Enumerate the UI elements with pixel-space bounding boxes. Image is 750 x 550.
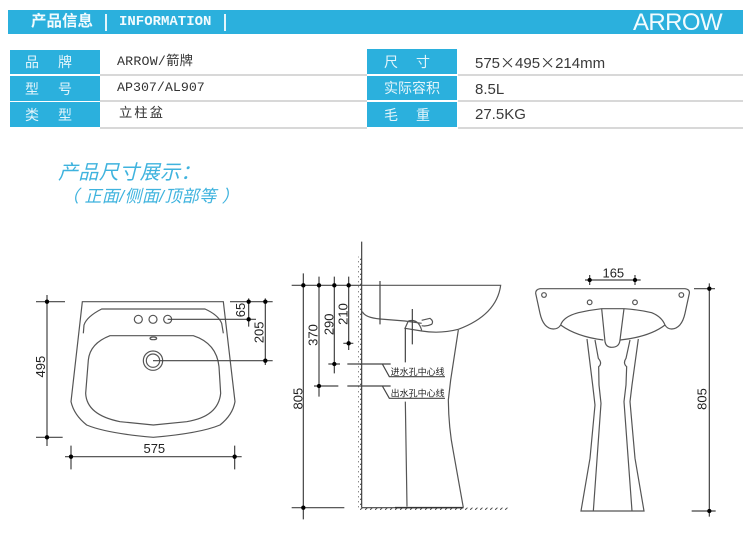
spec table left xyxy=(10,50,367,129)
header title english: INFORMATION xyxy=(119,14,211,30)
tap holes xyxy=(134,315,172,323)
header divider two xyxy=(224,14,226,31)
dimension 805: 805 xyxy=(694,388,709,410)
header title chinese: 产品信息 xyxy=(31,13,93,30)
heading line two: （ 正面/侧面/顶部等 ） xyxy=(62,187,239,206)
row: model value: AP307/AL907 xyxy=(117,80,205,95)
drawing: rear view of basin xyxy=(536,265,716,517)
row: capacity label: 实际容积 xyxy=(384,80,440,96)
drawing: side view of basin xyxy=(290,242,510,519)
overflow hole xyxy=(150,337,157,340)
basin ledge xyxy=(83,309,223,333)
heading line one: 产品尺寸展示： xyxy=(58,162,201,184)
row: capacity value: 8.5L xyxy=(475,81,504,98)
dimension 65 and 205: 65 xyxy=(233,303,248,317)
row: weight label xyxy=(367,102,457,127)
row: brand label xyxy=(10,50,100,74)
basin outline xyxy=(71,302,235,437)
drawing: front view of basin xyxy=(33,295,273,469)
pedestal xyxy=(405,330,463,508)
section heading xyxy=(58,162,239,206)
spec table right xyxy=(367,49,743,129)
row: model label: 号 xyxy=(58,80,72,96)
basin back outline xyxy=(536,289,689,329)
separator two xyxy=(100,100,367,102)
row: type label xyxy=(10,102,100,127)
dimensions 210 290 370 805: 370 xyxy=(305,324,320,346)
row: type label: 类 xyxy=(25,106,39,122)
mounting holes xyxy=(542,293,684,305)
dimension 575 xyxy=(65,441,242,469)
pedestal inner xyxy=(593,340,632,511)
separator three xyxy=(100,127,367,129)
basin underside xyxy=(561,325,665,340)
drain xyxy=(143,351,163,370)
separator two xyxy=(458,100,743,102)
pedestal outer xyxy=(581,339,644,511)
row: weight label: 毛 xyxy=(384,106,398,122)
basin profile xyxy=(362,285,501,332)
dimensions 210 290 370 805 xyxy=(290,273,362,519)
centre marks xyxy=(380,281,412,362)
row: type value: 立柱盆 xyxy=(119,106,165,121)
dimensions 210 290 370 805: 210 xyxy=(335,303,350,325)
row: brand label: 品 xyxy=(25,54,39,70)
separator one xyxy=(100,74,367,76)
row: type label: 型 xyxy=(58,106,72,122)
dimensions 210 290 370 805: 290 xyxy=(321,313,336,335)
callout: outlet centre line: 出水孔中心线 xyxy=(391,388,445,399)
separator one xyxy=(458,74,743,76)
basin bowl xyxy=(86,336,221,425)
dimension 805 xyxy=(692,283,716,517)
row: size label: 尺 xyxy=(384,54,398,70)
callout: outlet centre line xyxy=(347,386,445,399)
centre piece xyxy=(602,309,624,347)
wall xyxy=(358,242,362,508)
callout: inlet centre line xyxy=(347,364,445,377)
dimension 495 xyxy=(33,295,65,446)
row: weight label: 重 xyxy=(416,106,430,122)
row: brand label: 牌 xyxy=(58,54,72,70)
dimension 165: 165 xyxy=(602,265,624,280)
callout: inlet centre line: 进水孔中心线 xyxy=(391,366,445,377)
header divider one xyxy=(105,14,107,31)
brand logo text: ARROW xyxy=(633,9,722,36)
row: brand value: ARROW/箭牌 xyxy=(117,54,193,69)
dimension 65 and 205: 205 xyxy=(251,321,266,343)
floor xyxy=(358,508,510,511)
row: weight value: 27.5KG xyxy=(475,106,526,123)
row: size label: 寸 xyxy=(416,54,430,70)
row: size value: 575×495×214mm xyxy=(475,52,605,73)
row: model label xyxy=(10,76,100,101)
row: model label: 型 xyxy=(25,80,39,96)
dimensions 210 290 370 805: 805 xyxy=(290,388,305,410)
row: capacity label xyxy=(367,76,457,100)
header bar xyxy=(8,10,743,34)
dimension 165 xyxy=(585,265,641,285)
dimension 575: 575 xyxy=(143,441,165,456)
row: size label xyxy=(367,49,457,74)
separator three xyxy=(458,127,743,129)
dimension 65 and 205 xyxy=(153,298,273,365)
dimension 495: 495 xyxy=(33,356,48,378)
